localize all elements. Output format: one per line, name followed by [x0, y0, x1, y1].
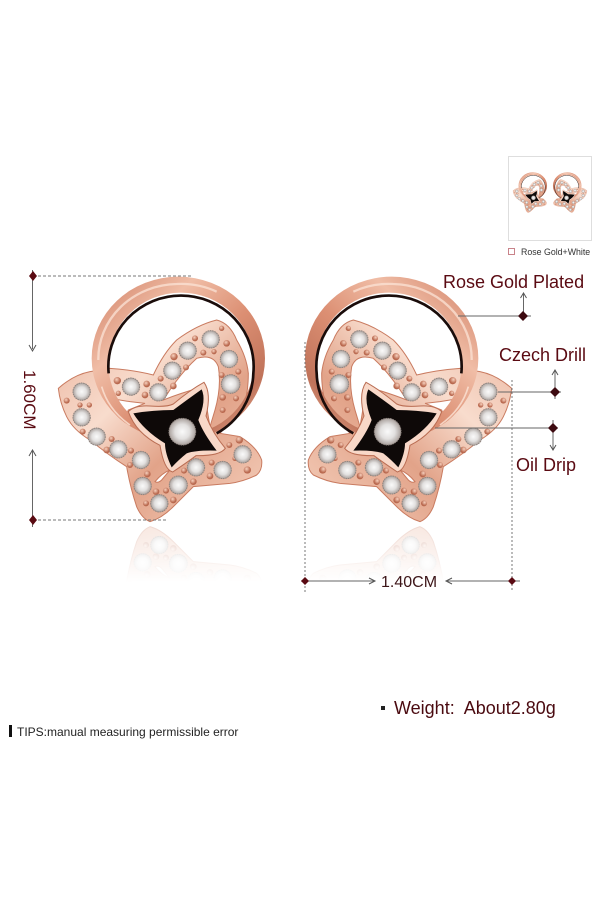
- width dimension: 1.40CM: 1.40CM: [381, 574, 437, 591]
- callout: Rose Gold Plated: Rose Gold Plated: [443, 272, 584, 292]
- height dimension: 1.60CM: 1.60CM: [20, 370, 39, 430]
- tips note: TIPS:manual measuring permissible error: [17, 725, 238, 739]
- callout: Czech Drill: Czech Drill: [499, 345, 586, 365]
- callout: Rose Gold Plated: [443, 272, 584, 321]
- left earring: [58, 277, 265, 522]
- left earring reflection: [128, 526, 254, 572]
- colour option thumbnail: [508, 156, 592, 240]
- right earring reflection: [316, 526, 442, 572]
- height dimension: 1.60CM: [20, 270, 193, 527]
- colour option label: Rose Gold+White: [521, 247, 590, 257]
- width dimension: 1.40CM: [301, 342, 520, 592]
- callout: Oil Drip: [435, 420, 576, 475]
- callout: Czech Drill: [498, 345, 586, 399]
- callout: Oil Drip: Oil Drip: [516, 455, 576, 475]
- weight: Weight: About2.80g: [394, 698, 556, 718]
- right earring: [305, 277, 512, 522]
